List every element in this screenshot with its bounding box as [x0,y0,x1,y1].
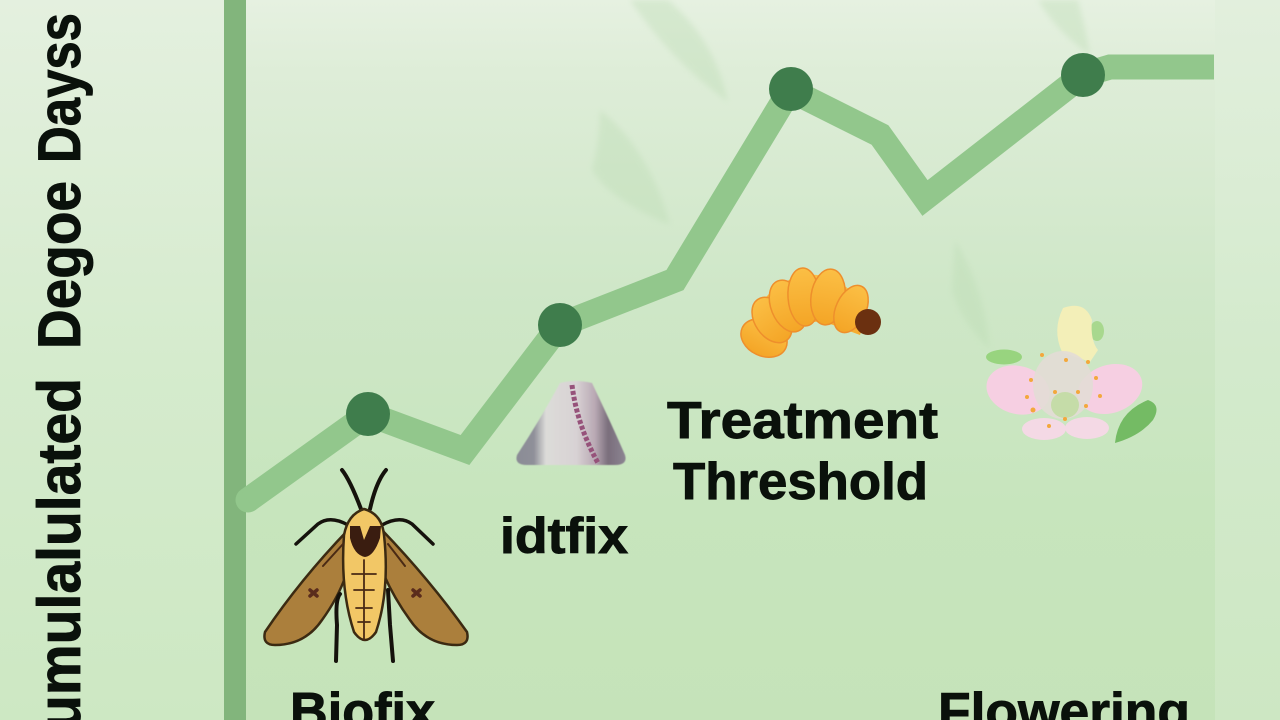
y-axis line [224,0,246,720]
text: treatment threshold: Treatment [667,392,938,450]
marker: flowering [1061,53,1105,97]
y-axis title: Degoe [26,181,93,349]
icon: grub [735,267,881,364]
y-axis title: umulalulated [26,378,93,720]
faint background leaves [592,0,1090,350]
y-axis title [26,13,93,720]
icon: flower [981,306,1157,443]
icon: moth [264,470,468,661]
text: treatment threshold [667,392,938,511]
marker: treatment [769,67,813,111]
degree day curve [236,53,1214,512]
marker: second stage [538,303,582,347]
text: treatment threshold: Threshold [673,453,928,511]
text: garbled stage label: idtfix [500,508,628,564]
icon: cone [516,381,626,465]
marker: biofix [346,392,390,436]
